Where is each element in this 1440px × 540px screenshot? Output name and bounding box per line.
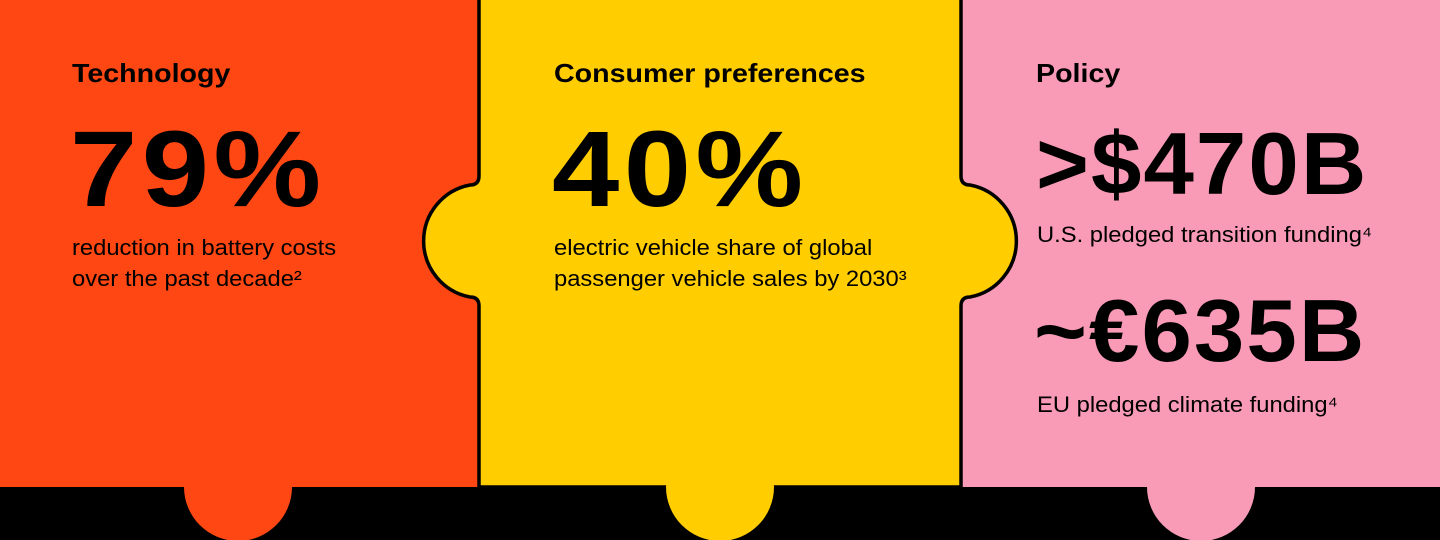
- text: EU funding: EU pledged climate funding⁴: [1037, 392, 1338, 417]
- text: battery costs: [72, 235, 336, 291]
- text: battery costs: reduction in battery costs: [72, 235, 336, 260]
- text: EV share: passenger vehicle sales by 2030³: [554, 266, 907, 291]
- heading: Technology: Technology: [72, 58, 230, 88]
- heading: Policy: Policy: [1036, 58, 1120, 88]
- stat: >$470B: >$470B: [1036, 114, 1368, 213]
- panel: yellow puzzle piece: [424, 0, 1016, 487]
- heading: Consumer preferences: Consumer preferences: [554, 58, 866, 88]
- text: EV share: [554, 235, 907, 291]
- tab: yellow bottom: [666, 433, 774, 540]
- text: US funding: U.S. pledged transition funding⁴: [1037, 222, 1372, 247]
- text: EV share: electric vehicle share of global: [554, 235, 872, 260]
- tab: pink bottom: [1147, 433, 1255, 540]
- tab: orange bottom: [184, 433, 292, 540]
- stat: ~€635B: ~€635B: [1034, 281, 1366, 380]
- stat: 79%: 79%: [70, 108, 326, 229]
- stat: 40%: 40%: [552, 108, 808, 229]
- text: battery costs: over the past decade²: [72, 266, 302, 291]
